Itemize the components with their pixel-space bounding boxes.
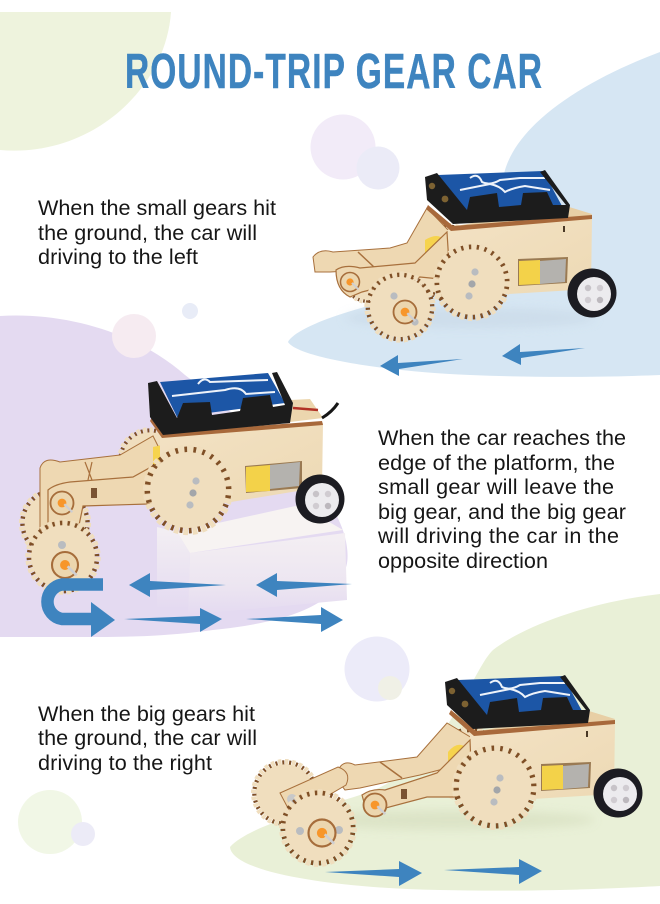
text block: big gears hit the ground: When the big gears hit: [38, 701, 255, 726]
arrow: middle lower left: [124, 608, 222, 632]
car illustration: top, driving left: [313, 170, 616, 340]
text block: small gears hit the ground: driving to the left: [38, 244, 198, 269]
text block: car reaches the edge: [377, 425, 626, 573]
platform box: [157, 505, 347, 615]
background blob: purple: [0, 316, 348, 637]
decorative circles: bottom-left cluster: [18, 790, 95, 854]
decorative circles: middle cluster: [112, 303, 198, 358]
text block: car reaches the edge: big gear, and the big gear: [378, 499, 626, 524]
text block: small gears hit the ground: When the small gears hit: [38, 195, 276, 220]
text block: small gears hit the ground: the ground, the car will: [38, 220, 257, 245]
arrow: middle lower right: [246, 607, 343, 632]
arrow: top left: [380, 355, 463, 376]
text block: car reaches the edge: edge of the platform, the: [378, 450, 615, 475]
text block: car reaches the edge: opposite direction: [378, 548, 548, 573]
car illustration: middle, at platform edge: [22, 372, 345, 592]
text block: car reaches the edge: When the car reaches the: [378, 425, 626, 450]
background blob: top-left green: [0, 12, 171, 151]
car illustration: bottom, driving right: [253, 675, 642, 864]
text block: big gears hit the ground: driving to the right: [38, 750, 212, 775]
text block: big gears hit the ground: the ground, the car will: [38, 725, 257, 750]
decorative circles: top cluster: [310, 114, 400, 190]
arrow: bottom right: [444, 859, 542, 884]
arrow: bottom left: [325, 861, 422, 886]
arrow: middle upper right: [256, 573, 352, 597]
text block: car reaches the edge: small gear will leave the: [378, 474, 614, 499]
arrow: top right: [502, 344, 585, 365]
decorative circles: lower cluster: [344, 636, 410, 702]
text block: big gears hit the ground: [38, 701, 257, 775]
background blob: green: [230, 594, 660, 891]
arrow: middle upper left: [129, 573, 226, 597]
background blob: blue: [288, 52, 660, 377]
arrow: u-turn: [47, 584, 115, 637]
text block: small gears hit the ground: [38, 195, 276, 269]
text block: car reaches the edge: will driving the car in the: [377, 523, 619, 548]
